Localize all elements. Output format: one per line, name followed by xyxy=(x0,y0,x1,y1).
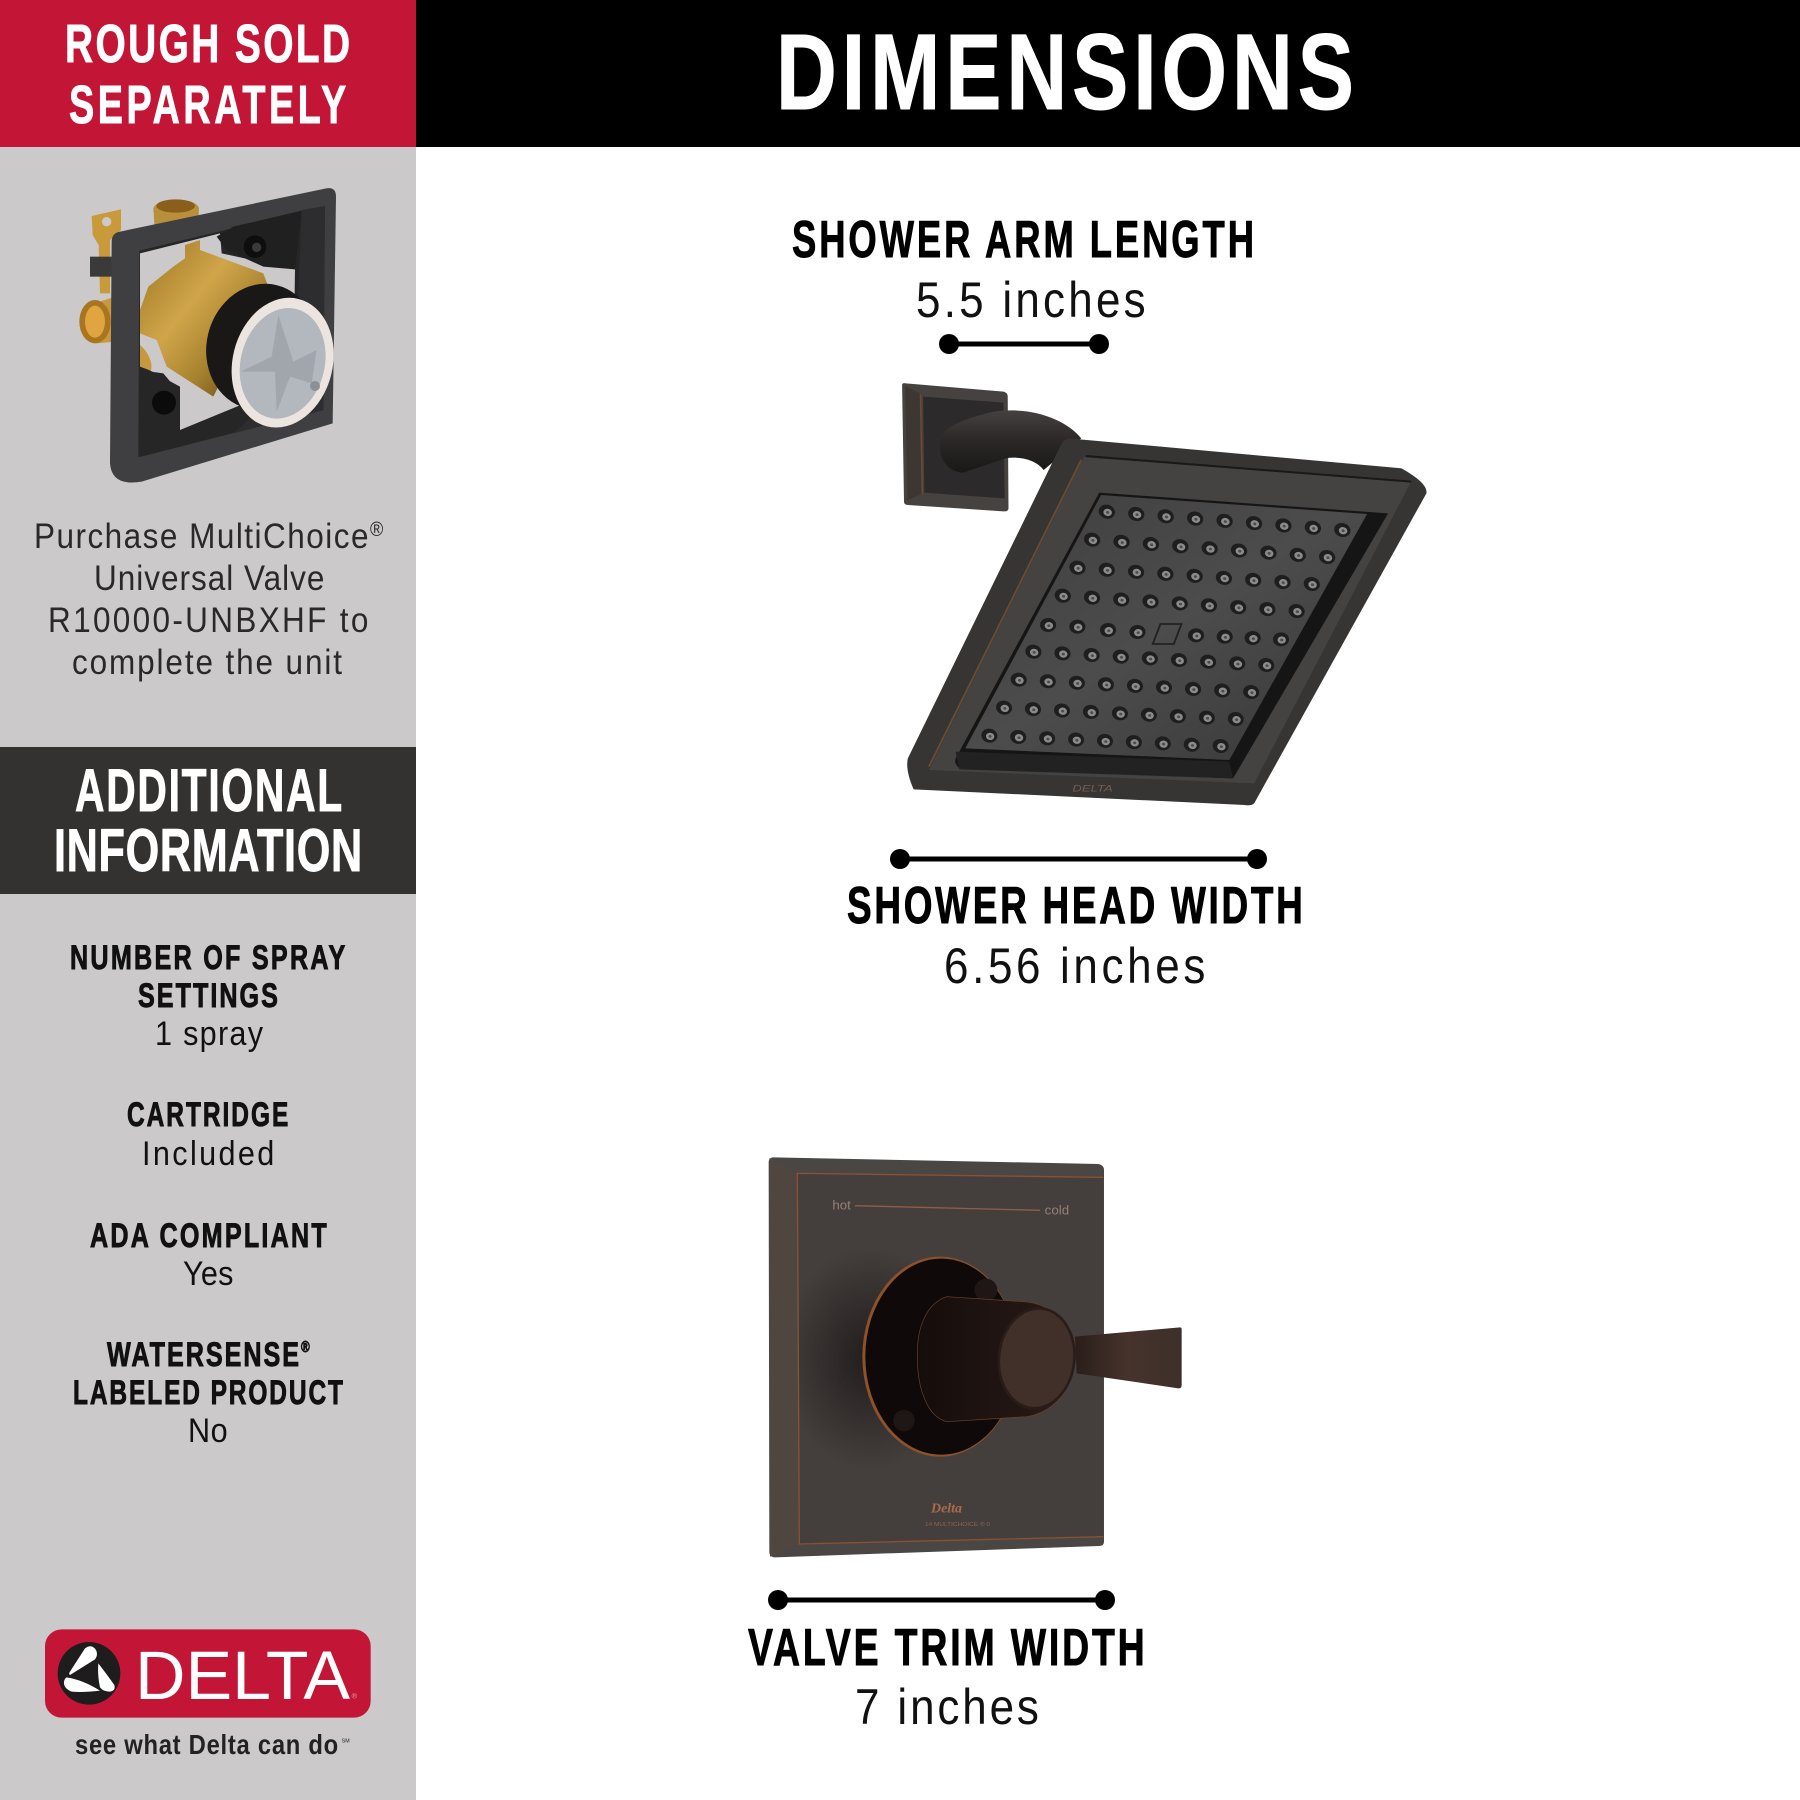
panel: sidebar xyxy=(0,0,416,1800)
dimension: shower head width: SHOWER HEAD WIDTH xyxy=(847,876,1303,935)
head outer xyxy=(907,438,1427,805)
spec: ada compliant: Yes xyxy=(183,1255,233,1292)
spec: cartridge: Included xyxy=(142,1135,274,1172)
scale: cold xyxy=(1045,1203,1069,1218)
banner text: ROUGH SOLD xyxy=(65,13,350,73)
spec: watersense labeled product xyxy=(73,1336,343,1449)
spec: number of spray settings: SETTINGS xyxy=(138,977,278,1015)
measure line xyxy=(768,1590,1115,1610)
text: purchase note: Purchase MultiChoice xyxy=(34,518,368,556)
banner text xyxy=(65,13,350,135)
additional information heading: INFORMATION xyxy=(54,818,362,885)
spec: number of spray settings: NUMBER OF SPRAY xyxy=(70,939,345,977)
dimension: shower head width xyxy=(847,849,1303,994)
scale xyxy=(832,1197,1069,1218)
plate xyxy=(769,1157,1104,1557)
spec: watersense labeled product: No xyxy=(188,1412,228,1449)
title: DIMENSIONS xyxy=(776,11,1354,132)
banner text: SEPARATELY xyxy=(69,74,346,135)
spec: cartridge xyxy=(127,1096,288,1172)
recess xyxy=(955,493,1388,778)
dimension: shower arm length xyxy=(792,209,1254,354)
dimension: shower head width: 6.56 inches xyxy=(944,937,1205,994)
knob face xyxy=(994,1305,1079,1412)
logo: delta xyxy=(45,1629,371,1760)
image: shower head xyxy=(902,383,1427,805)
text: purchase note: ® xyxy=(370,519,383,541)
logo: delta: DELTA xyxy=(135,1638,350,1714)
heading bar: dimensions xyxy=(416,0,1800,147)
image: rough-in valve xyxy=(79,188,347,483)
dimension: valve trim width: 7 inches xyxy=(855,1678,1039,1735)
image: valve trim: 14 MULTICHOICE ® 0 xyxy=(925,1521,990,1528)
text: purchase note xyxy=(34,518,383,682)
escutcheon xyxy=(862,1257,1018,1457)
brand: Delta xyxy=(930,1502,962,1517)
image: valve trim xyxy=(769,1157,1182,1557)
logo: delta: SM xyxy=(342,1739,350,1745)
spec: ada compliant: ADA COMPLIANT xyxy=(90,1217,327,1255)
brand mark: DELTA xyxy=(1072,784,1113,794)
text: purchase note: Universal Valve xyxy=(94,560,324,598)
handle xyxy=(1075,1327,1182,1388)
dimension: valve trim width: VALVE TRIM WIDTH xyxy=(748,1618,1145,1676)
spec: number of spray settings xyxy=(70,939,345,1052)
spec: ada compliant xyxy=(90,1217,327,1292)
arm xyxy=(940,410,1081,473)
scale: hot xyxy=(832,1197,851,1212)
flange xyxy=(902,383,1008,511)
logo: delta: see what Delta can do xyxy=(75,1728,338,1760)
face xyxy=(965,495,1367,760)
nozzles xyxy=(981,504,1350,753)
spec: watersense labeled product: ® xyxy=(301,1337,310,1355)
text: purchase note: complete the unit xyxy=(72,644,342,682)
spec: watersense labeled product: WATERSENSE xyxy=(107,1336,299,1374)
additional information heading xyxy=(54,757,362,885)
screws xyxy=(893,1279,997,1431)
heading bar: additional information xyxy=(0,747,416,894)
spec: cartridge: CARTRIDGE xyxy=(127,1096,288,1134)
measure line xyxy=(890,849,1267,869)
additional information heading: ADDITIONAL xyxy=(75,757,342,824)
measure line xyxy=(939,334,1109,354)
knob body xyxy=(917,1297,1073,1422)
logo: delta: ® xyxy=(352,1692,358,1701)
spec: number of spray settings: 1 spray xyxy=(155,1015,264,1052)
panel: rough sold separately banner xyxy=(0,0,416,147)
dimension: shower arm length: 5.5 inches xyxy=(916,271,1146,328)
text: purchase note: R10000-UNBXHF to xyxy=(48,602,368,640)
dimension: valve trim width xyxy=(748,1590,1145,1735)
dimension: shower arm length: SHOWER ARM LENGTH xyxy=(792,209,1254,269)
spec: watersense labeled product: LABELED PRODUCT xyxy=(73,1374,343,1412)
